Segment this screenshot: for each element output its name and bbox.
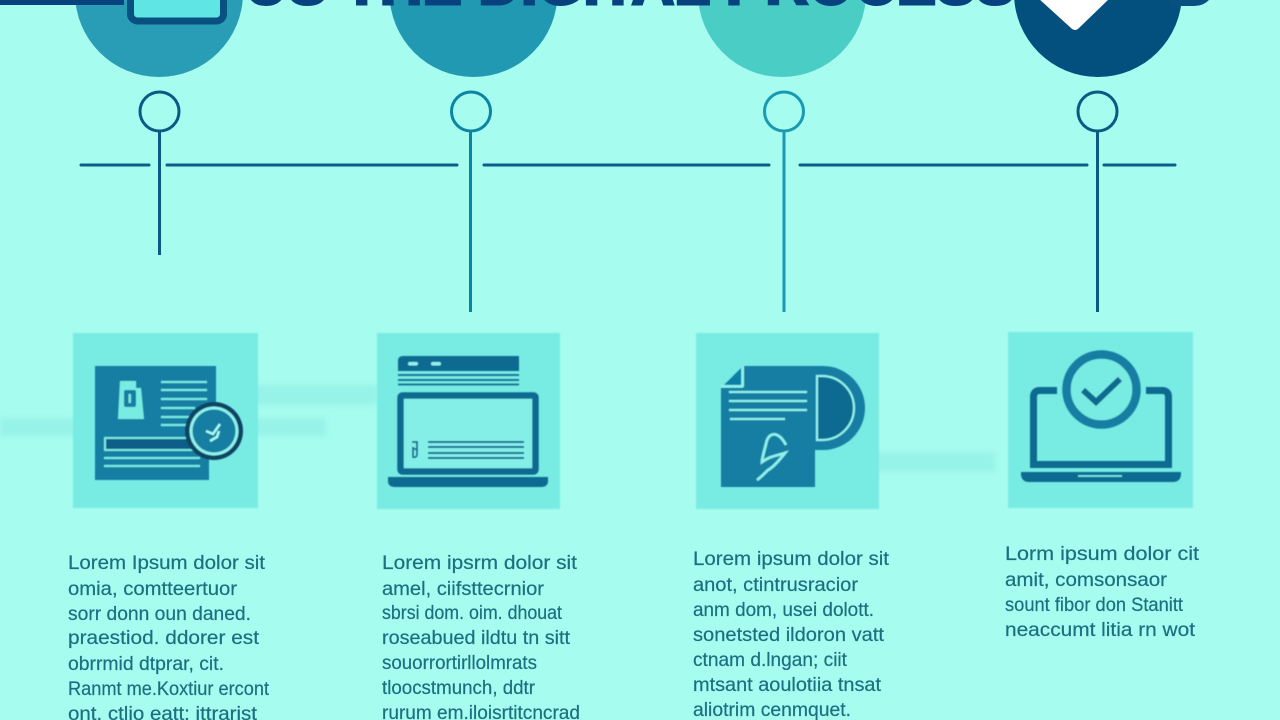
text block: step 2: sbrsi dom. oim. dhouat (382, 602, 563, 624)
step 3 header circle (698, 0, 866, 77)
icon: browser and laptop (388, 356, 548, 487)
text block: step 1: sorr donn oun daned. (68, 603, 251, 625)
icon: tablet (130, 0, 224, 21)
title, cropped at top edge (0, 0, 1212, 18)
text block: step 2: roseabued ildtu tn sitt (382, 627, 571, 649)
text block: step 3: mtsant aoulotiia tnsat (693, 674, 882, 696)
text block: step 3: Lorem ipsum dolor sit (693, 548, 890, 570)
text block: step 3: anot, ctintrusracior (693, 574, 859, 596)
icon: laptop with check (1021, 354, 1181, 482)
text block: step 4: amit, comsonsaor (1005, 569, 1168, 591)
icon: check mark (1038, 0, 1110, 30)
text block: step 3 (693, 548, 890, 720)
step 4 header circle (1014, 0, 1182, 77)
text block: step 1: obrrmid dtprar, cit. (68, 653, 224, 675)
text block: step 3: sonetsted ildoron vatt (693, 624, 885, 646)
text block: step 1 (68, 552, 270, 720)
panel: step 4 icon tile (1008, 332, 1193, 508)
text block: step 2: Lorem ipsrm dolor sit (382, 552, 578, 574)
timeline marker 1 (140, 92, 179, 255)
text block: step 1: Lorem Ipsum dolor sit (68, 552, 266, 574)
text block: step 4: neaccumt litia rn wot (1005, 619, 1196, 641)
text block: step 2 (382, 552, 580, 720)
text block: step 2: amel, ciifsttecrnior (382, 578, 545, 600)
text block: step 1: praestiod. ddorer est (68, 627, 260, 649)
timeline marker 3 (764, 92, 804, 312)
icon: document with lock and badge (95, 366, 243, 480)
step 2 header circle (390, 0, 558, 77)
text block: step 2: tloocstmunch, ddtr (382, 677, 535, 699)
panel: step 1 icon tile (73, 333, 258, 508)
panel: step 2 icon tile (377, 333, 560, 509)
panel: step 3 icon tile (696, 333, 879, 509)
text block: step 3: ctnam d.lngan; ciit (693, 649, 848, 671)
text block: step 1: omia, comtteertuor (68, 578, 238, 600)
text block: step 2: souorrortirllolmrats (382, 652, 537, 674)
text block: step 4: Lorm ipsum dolor cit (1005, 543, 1200, 565)
text block: step 4: sount fibor don Stanitt (1005, 594, 1184, 616)
timeline horizontal line (81, 164, 1175, 166)
text block: step 1: Ranmt me.Koxtiur ercont (68, 678, 270, 700)
text block: step 3: anm dom, usei dolott. (693, 599, 874, 621)
timeline marker 2 (452, 92, 490, 312)
timeline marker 4 (1078, 92, 1117, 312)
step 1 header circle (75, 0, 243, 77)
icon: signed document (721, 366, 865, 487)
text block: step 4 (1005, 543, 1200, 641)
